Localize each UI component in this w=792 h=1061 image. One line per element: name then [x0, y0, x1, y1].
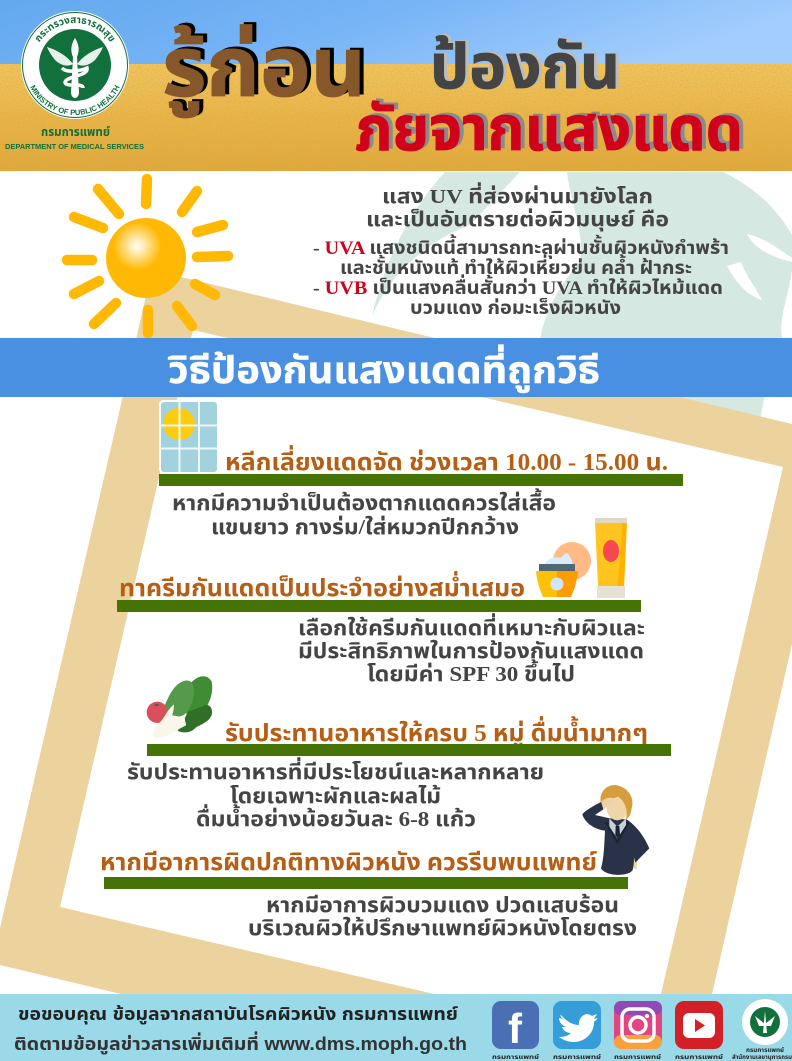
tip 2 body: [298, 613, 645, 686]
title: danger from sunlight: ภัยจากแสงแดด: [359, 93, 747, 162]
tip 3 body: โดยเฉพาะผักและผลไม้: [230, 784, 441, 808]
header sky: [0, 0, 792, 65]
social account captions: กรมการแพทย์: [675, 1053, 723, 1061]
uvb description: บวมแดง ก่อมะเร็งผิวหนัง: [410, 296, 621, 319]
tip 4 body: บริเวณผิวให้ปรึกษาแพทย์ผิวหนังโดยตรง: [248, 916, 637, 940]
icon: small ministry logo: [742, 999, 788, 1045]
tip 3: food: [127, 676, 671, 831]
title: prevent: ป้องกัน: [430, 33, 620, 102]
tip 1 heading: หลีกเลี่ยงแดดจัด ช่วงเวลา 10.00 - 15.00 น.: [225, 445, 668, 476]
title: know first: รู้ก่อน: [162, 20, 366, 118]
header wheat field: [0, 64, 792, 171]
social account captions: กรมการแพทย์: [614, 1053, 661, 1061]
tip 1: avoid strong sun: [159, 400, 683, 539]
ministry logo: กระทรวงสาธารณสุข: [36, 17, 115, 42]
footer credit text: ขอขอบคุณ ข้อมูลจากสถาบันโรคผิวหนัง กรมการแพทย์: [18, 1004, 458, 1025]
footer website text: ติดตามข้อมูลข่าวสารเพิ่มเติมที่ www.dms.moph.go.th: [14, 1031, 467, 1055]
tip 3 body: ดื่มน้ำอย่างน้อยวันละ 6-8 แก้ว: [196, 804, 476, 831]
tip 2 green bar: [117, 600, 641, 612]
section heading: วิธีป้องกันแสงแดดที่ถูกวิธี: [168, 344, 600, 393]
department name: กรมการแพทย์: [41, 125, 110, 139]
icon: youtube: [675, 1001, 723, 1049]
icon: facebook: f: [508, 1005, 523, 1052]
tip 1 body: หากมีความจำเป็นต้องตากแดดควรใส่เสื้อ: [172, 488, 556, 515]
title: know first: รู้ก่อน: [166, 18, 370, 116]
uva description: และชั้นหนังแท้ ทำให้ผิวเหี่ยวย่น คล้ำ ฝ้ากระ: [340, 254, 692, 279]
department name: DEPARTMENT OF MEDICAL SERVICES: [5, 142, 144, 151]
social account captions: [492, 1046, 792, 1061]
tip 2 heading: ทาครีมกันแดดเป็นประจำอย่างสม่ำเสมอ: [119, 571, 525, 602]
footer: [0, 994, 792, 1061]
tip 3 green bar: [147, 744, 671, 756]
icon: worried person: [582, 785, 649, 875]
icon: window with sun: [159, 400, 218, 473]
tip 1 body: แขนยาว กางร่ม/ใส่หมวกปีกกว้าง: [211, 515, 519, 539]
title: prevent: ป้องกัน: [433, 32, 623, 101]
tip 2: sunscreen: [117, 518, 645, 686]
tip 3 body: รับประทานอาหารที่มีประโยชน์และหลากหลาย: [127, 757, 544, 784]
icon: sunscreen tube and jar: [536, 518, 627, 598]
tip 4: see a doctor: [100, 785, 649, 940]
tip 1 body: [172, 488, 556, 539]
title: danger from sunlight: ภัยจากแสงแดด: [355, 95, 743, 164]
uvb description: [313, 274, 723, 319]
ministry logo: MINISTRY OF PUBLIC HEALTH: [30, 84, 120, 115]
uv heading: แสง UV ที่ส่องผ่านมายังโลก: [382, 182, 653, 208]
social account captions: กรมการแพทย์: [492, 1053, 539, 1061]
tip 2 body: มีประสิทธิภาพในการป้องกันแสงแดด: [298, 639, 644, 663]
tip 4 body: หากมีอาการผิวบวมแดง ปวดแสบร้อน: [266, 893, 619, 917]
tip 3 body: [127, 757, 544, 831]
uvb description: - UVB เป็นแสงคลื่นสั้นกว่า UVA ทำให้ผิวไหม้แดด: [313, 274, 723, 299]
uv heading: [366, 182, 669, 231]
icon: facebook: [492, 1001, 539, 1052]
tip 4 body: [248, 893, 637, 940]
icon: twitter: [553, 1001, 601, 1049]
blue section band: [0, 338, 792, 397]
icon: instagram: [614, 1001, 662, 1049]
tip 3 heading: รับประทานอาหารให้ครบ 5 หมู่ ดื่มน้ำมากๆ: [225, 716, 648, 748]
uv heading: และเป็นอันตรายต่อผิวมนุษย์ คือ: [366, 208, 669, 231]
background globe: [372, 172, 792, 420]
uva description: [313, 234, 729, 279]
social account captions: กรมการแพทย์: [746, 1046, 784, 1054]
tip 2 body: โดยมีค่า SPF 30 ขึ้นไป: [367, 659, 575, 686]
icon: vegetables: [147, 676, 212, 738]
icon: sun: [67, 179, 228, 333]
header banner: [0, 0, 792, 171]
department name: [5, 125, 144, 151]
background tan tilted frame: [0, 270, 792, 994]
social account captions: กรมการแพทย์: [553, 1053, 601, 1061]
tip 4 green bar: [104, 877, 628, 889]
uva description: - UVA แสงชนิดนี้สามารถทะลุผ่านชั้นผิวหนังกำพร้า: [313, 234, 729, 259]
tip 1 green bar: [159, 474, 683, 486]
ministry logo: [21, 11, 129, 119]
tip 4 heading: หากมีอาการผิดปกติทางผิวหนัง ควรรีบพบแพทย์: [100, 849, 597, 876]
uv explanation text: [313, 182, 729, 319]
tip 2 body: เลือกใช้ครีมกันแดดที่เหมาะกับผิวและ: [298, 613, 645, 640]
